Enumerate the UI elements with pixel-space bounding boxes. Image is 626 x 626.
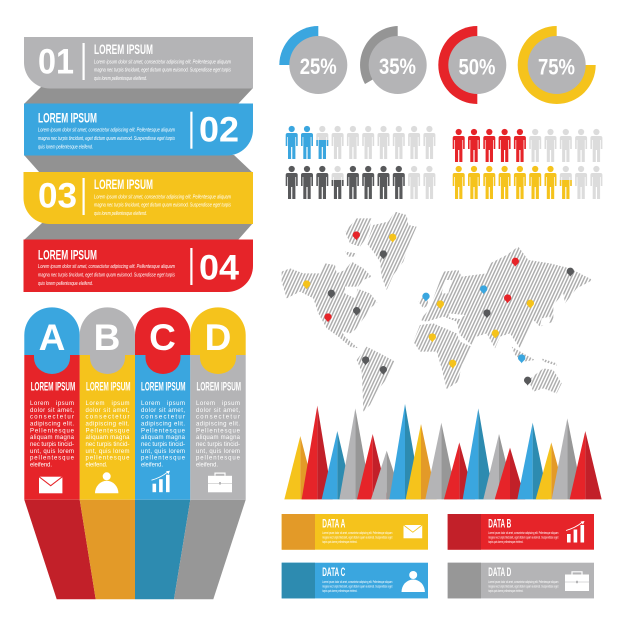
donut 75% [518,26,596,104]
column A: adipiscing elit. [30,422,74,428]
banner 02: Lorem ipsum dolor sit amet, consectetur adipiscing elit. Pellentesque aliquam [38,128,176,134]
column B: LOREM IPSUM [86,382,130,394]
column A: LOREM IPSUM [31,382,75,394]
column D: Lorem ipsum [196,401,240,407]
data bar A: DATA A [322,518,345,530]
data bar C [282,563,428,598]
column B: unt, quis lorem [86,449,130,455]
column B: dolor sit amet, [86,408,130,414]
donut 25% [279,26,347,94]
column C: Pellentesque [141,428,186,434]
column B: nec turpis tincid- [86,442,130,448]
data bar A: Lorem ipsum dolor sit amet, consectetur adipiscing elit. Pellentesque aliquam [322,531,392,535]
banner 01: 01 [38,42,74,82]
column B [80,307,135,599]
column C: Lorem ipsum [141,401,185,407]
data bar A: turpis quis lorem pellentesque eleifend. [322,540,357,544]
banner 01: quis lorem pellentesque eleifend. [94,76,147,82]
data bar C: turpis quis lorem pellentesque eleifend. [322,589,357,593]
column D: LOREM IPSUM [196,382,241,394]
donut 35% [360,26,427,94]
banner 04 [24,240,253,292]
banner 02: LOREM IPSUM [38,110,97,126]
map: continents [282,212,593,412]
donut 35%: 35% [379,54,416,79]
data bar B: turpis quis lorem pellentesque eleifend. [488,540,523,544]
column B: Pellentesque [86,428,130,434]
banner 02 [24,104,253,156]
data bar C: DATA C [322,567,345,579]
world map with pins [282,212,593,412]
donut 25%: 25% [300,54,337,79]
column B: pellentesque [86,456,130,462]
column A: nec turpis tincid- [30,442,74,448]
data bar B: magna nec turpis tincidunt, eget dictum quam euismod. Suspendisse eget [488,536,558,540]
data bar C: magna nec turpis tincidunt, eget dictum quam euismod. Suspendisse eget [322,584,392,588]
column C: unt, quis lorem [141,449,185,455]
banner 01: magna nec turpis tincidunt, eget dictum quam euismod. Suspendisse eget turpis [94,68,231,74]
column B: Lorem ipsum [86,401,130,407]
column A [24,307,96,599]
banner 01: Lorem ipsum dolor sit amet, consectetur adipiscing elit. Pellentesque aliquam [94,59,232,65]
column A: consectetur [30,415,74,421]
banner 03: LOREM IPSUM [94,176,153,192]
column B: consectetur [86,415,130,421]
data bar B: Lorem ipsum dolor sit amet, consectetur adipiscing elit. Pellentesque aliquam [488,531,558,535]
column A: unt, quis lorem [30,449,74,455]
banner 04: quis lorem pellentesque eleifend. [38,281,93,287]
data bar B: DATA B [488,518,511,530]
banner 03: 03 [38,177,77,216]
column B: adipiscing elit. [86,422,130,428]
column A: dolor sit amet, [30,408,74,414]
column B: B [94,317,120,358]
column A: pellentesque [30,456,75,462]
banner 03: quis lorem pellentesque eleifend. [94,211,147,217]
column B: aliquam magna [86,435,130,441]
column D: adipiscing elit. [196,422,240,428]
map pins [303,231,574,386]
donut 50%: 50% [458,54,496,80]
column D: dolor sit amet, [196,408,240,414]
icon: growth chart [566,521,584,542]
fold connector 1 [24,86,253,104]
column C: dolor sit amet, [141,408,185,414]
icon: briefcase [208,473,232,492]
banner 03 [24,172,253,224]
banner 04: Lorem ipsum dolor sit amet, consectetur adipiscing elit. Pellentesque aliquam [38,264,176,270]
data bar D [448,563,594,598]
column D: D [205,317,231,358]
data bar D: turpis quis lorem pellentesque eleifend. [488,589,523,593]
banner 04: magna nec turpis tincidunt, eget dictum quam euismod. Suspendisse eget turpis [38,272,175,278]
data bar A: magna nec turpis tincidunt, eget dictum quam euismod. Suspendisse eget [322,536,392,540]
column C: eleifend. [141,462,163,468]
column A: Pellentesque [30,428,75,434]
fold connector 3 [24,223,253,240]
column C: aliquam magna [141,435,186,441]
panel: data bars [282,514,594,598]
panel: percentage donuts [279,26,596,104]
icon: growth chart [152,471,170,492]
banner 02: quis lorem pellentesque eleifend. [38,144,93,150]
column C: consectetur [141,415,185,421]
column D: pellentesque [196,456,241,462]
banner 02: magna nec turpis tincidunt, eget dictum quam euismod. Suspendisse eget turpis [38,136,175,142]
column D: aliquam magna [196,435,241,441]
column A: Lorem ipsum [30,401,74,407]
icon: person [95,472,118,493]
data bar C: Lorem ipsum dolor sit amet, consectetur adipiscing elit. Pellentesque aliquam [322,580,392,584]
icon: envelope [404,525,422,538]
people row: yellow [453,166,602,199]
column C: adipiscing elit. [141,422,185,428]
column D: unt, quis lorem [196,449,240,455]
icon: briefcase [565,572,589,591]
people row: dark [286,166,435,199]
column A: aliquam magna [30,435,75,441]
column C: pellentesque [141,456,186,462]
column D: Pellentesque [196,428,241,434]
data bar B [448,514,594,550]
column A: eleifend. [30,462,52,468]
donut 75%: 75% [538,54,575,80]
banner 03: Lorem ipsum dolor sit amet, consectetur adipiscing elit. Pellentesque aliquam [94,194,232,200]
column A: A [39,317,65,358]
icon: person [402,571,425,592]
column D: nec turpis tincid- [196,442,240,448]
column C [135,307,190,599]
panel: letter columns [24,307,246,599]
column D [174,307,246,599]
column D: consectetur [196,415,240,421]
data bar D: DATA D [488,567,511,579]
banner 03: magna nec turpis tincidunt, eget dictum quam euismod. Suspendisse eget turpis [94,202,231,208]
column C: LOREM IPSUM [141,382,186,394]
panel: numbered banners [24,37,253,292]
data bar A [282,514,428,550]
fold connector 2 [24,155,253,173]
banner 04: LOREM IPSUM [38,246,97,262]
banner 04: 04 [199,248,240,287]
column C: nec turpis tincid- [141,442,185,448]
triangle spike chart [284,404,602,499]
column B: eleifend. [86,462,108,468]
data bar D: magna nec turpis tincidunt, eget dictum quam euismod. Suspendisse eget [488,584,558,588]
column C: C [149,317,176,358]
people row: red [453,129,602,162]
banner 01 [24,37,253,88]
panel: people pictograms [286,126,602,199]
map: water cut-outs [345,280,550,326]
data bar D: Lorem ipsum dolor sit amet, consectetur adipiscing elit. Pellentesque aliquam [488,580,558,584]
people row: blue [286,126,435,159]
column D: eleifend. [196,462,218,468]
banner 01: LOREM IPSUM [94,41,153,57]
donut 50% [438,26,506,104]
banner 02: 02 [199,111,239,150]
icon: envelope [39,477,62,493]
